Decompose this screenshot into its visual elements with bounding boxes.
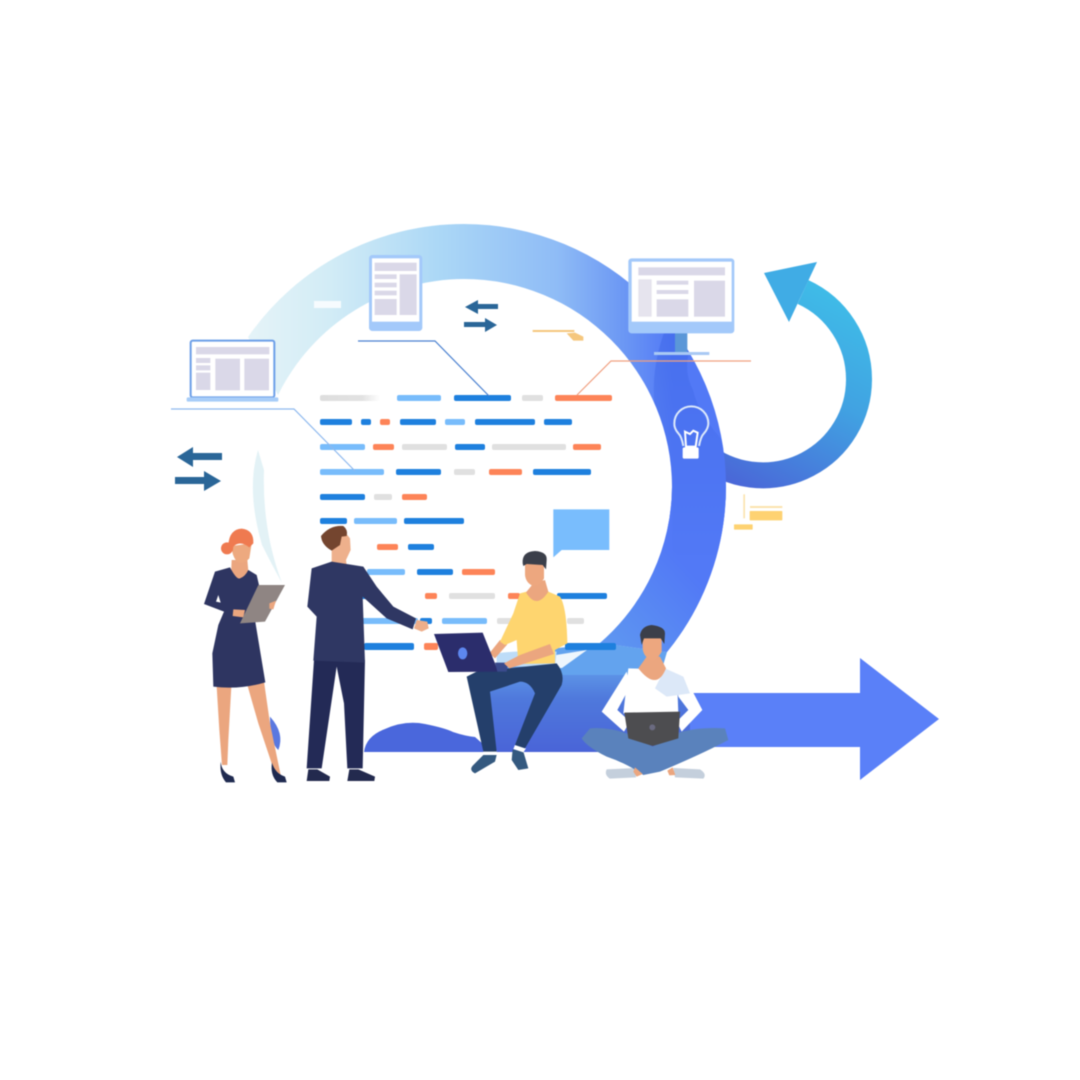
laptop device (187, 341, 278, 402)
tablet device (369, 255, 422, 331)
person: man cross-legged with laptop (582, 625, 728, 779)
illustration: agile cycle with team (170, 224, 940, 784)
swap arrows top (464, 300, 498, 332)
icon: light bulb (674, 406, 708, 459)
gold note top (533, 330, 583, 341)
forward arrow (680, 658, 939, 780)
swap arrows left (175, 447, 222, 491)
text line bars (320, 395, 616, 650)
person: man on laptop seated (434, 551, 567, 773)
speech bubble (553, 509, 609, 557)
cycle ring (248, 224, 735, 652)
curved return arrow (708, 262, 859, 475)
person: woman with tablet (204, 529, 287, 782)
person: man in suit pointing (307, 526, 429, 781)
gold note right (734, 494, 782, 530)
connector lines (171, 341, 751, 471)
monitor device (628, 258, 734, 355)
small white tag on ring (314, 301, 341, 308)
ring base (364, 643, 690, 752)
